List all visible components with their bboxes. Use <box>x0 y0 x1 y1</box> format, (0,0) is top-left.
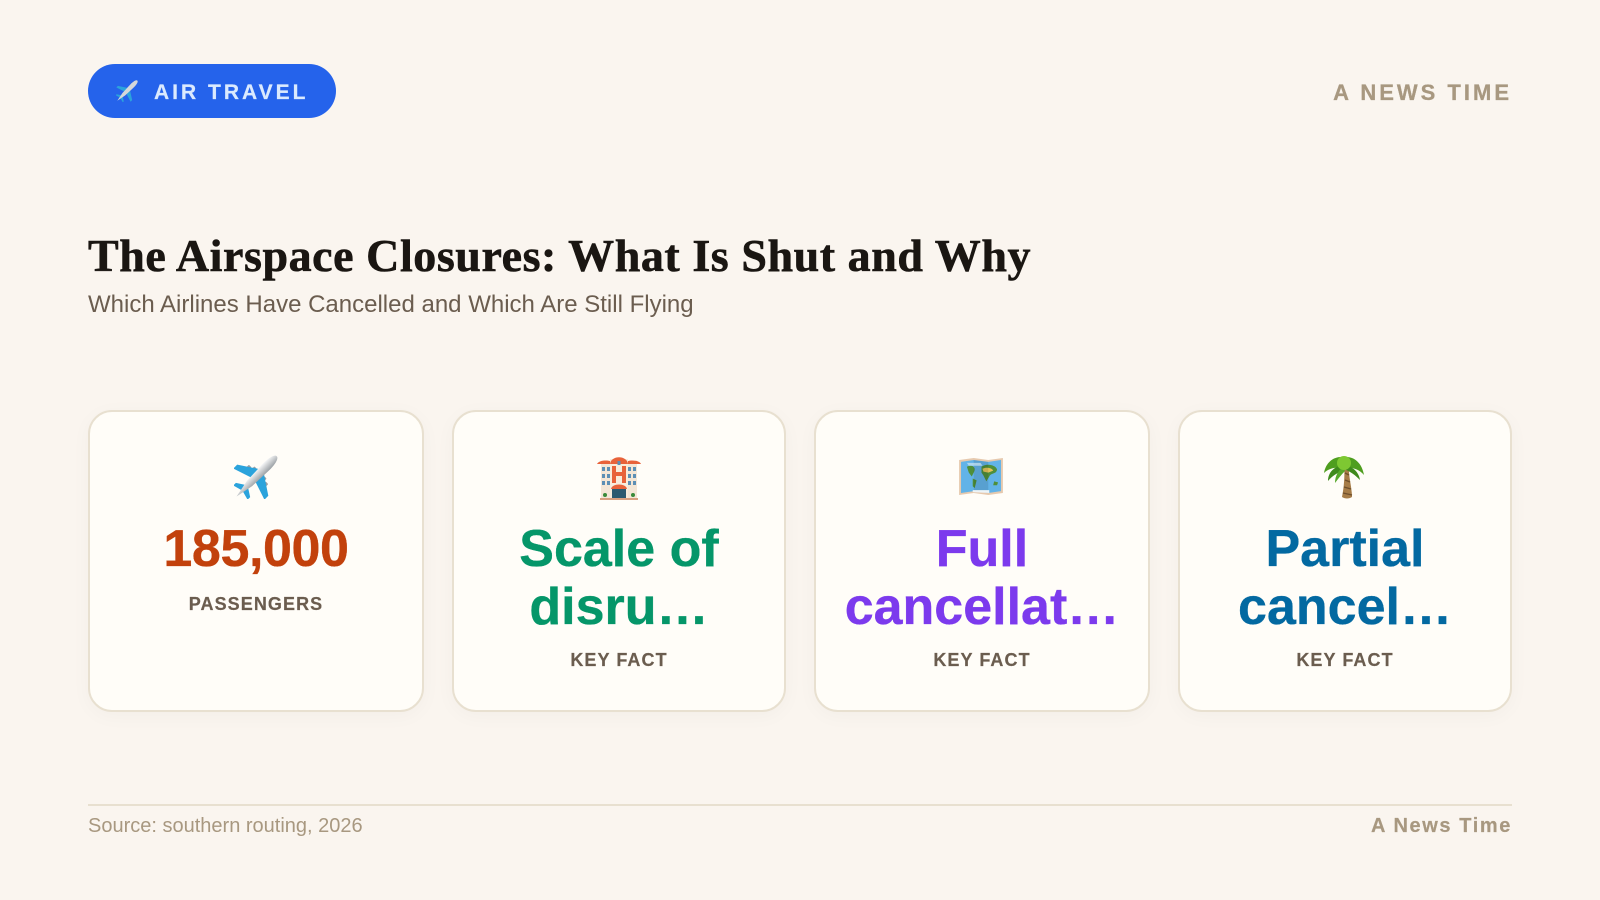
fact text <box>1238 520 1452 636</box>
fact text: disru… <box>529 578 709 636</box>
tag pill: air travel <box>88 64 336 118</box>
source note: Source: southern routing, 2026 <box>88 815 363 837</box>
fact text: Partial <box>1266 520 1424 578</box>
panel: full cancellations card <box>814 410 1150 712</box>
icon: small airplane <box>116 80 138 102</box>
label: key fact: KEY FACT <box>1296 650 1394 670</box>
tag label: AIR TRAVEL <box>154 81 308 104</box>
icon: airplane <box>234 456 278 499</box>
fact text: cancel… <box>1238 578 1452 636</box>
fact text <box>845 520 1119 636</box>
panel: scale of disruption card <box>452 410 786 712</box>
brand name: A NEWS TIME <box>1333 80 1512 105</box>
footer rule <box>88 804 1512 806</box>
fact text: Full <box>936 520 1028 578</box>
icon: hotel <box>597 457 641 500</box>
label: key fact: KEY FACT <box>570 650 668 670</box>
stat: 185,000: 185,000 <box>163 520 349 578</box>
footer brand: A News Time <box>1371 815 1512 837</box>
fact text <box>519 520 719 636</box>
fact text: Scale of <box>519 520 719 578</box>
subtitle: Which Airlines Have Cancelled and Which Are Still Flying <box>88 291 694 318</box>
panel: passengers card <box>88 410 424 712</box>
icon: world map <box>959 458 1003 495</box>
fact text: cancellat… <box>845 578 1119 636</box>
label: key fact: KEY FACT <box>933 650 1031 670</box>
label: passengers: PASSENGERS <box>189 594 323 614</box>
title: The Airspace Closures: What Is Shut and Why <box>88 230 1031 281</box>
icon: palm tree <box>1324 456 1364 498</box>
panel: partial cancellations card <box>1178 410 1512 712</box>
